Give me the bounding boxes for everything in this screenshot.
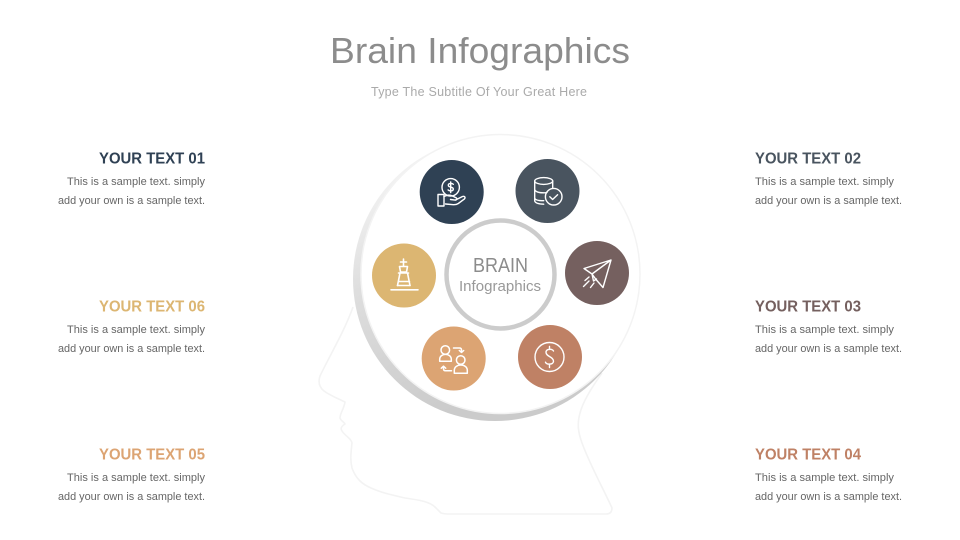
icon: chess piece [372,244,436,308]
text block 04: This is a sample text. simply [755,472,894,484]
text block 04: YOUR TEXT 04 [755,446,861,464]
icon: paper plane [565,241,629,305]
centre label [459,255,541,295]
text block 05: This is a sample text. simply [67,472,205,484]
text block 02: add your own is a sample text. [755,195,902,207]
text block 05: add your own is a sample text. [58,491,205,503]
icon: database check [516,159,580,223]
text block 04: add your own is a sample text. [755,491,902,503]
icon: people exchange [422,326,486,390]
text block 06: This is a sample text. simply [67,324,205,336]
text block 05 [58,446,205,503]
icon: coin in hand [420,160,484,224]
subtitle: Type The Subtitle Of Your Great Here [371,85,587,99]
centre label: Infographics [459,279,541,295]
text block 02 [755,150,902,207]
text block 01 [58,150,205,207]
text block 03 [755,298,902,355]
icon: dollar circle [518,325,582,389]
text block 01: YOUR TEXT 01 [99,150,205,168]
title: Brain Infographics [330,30,630,71]
brain white disc [361,134,640,414]
text block 06: add your own is a sample text. [58,343,205,355]
text block 03: YOUR TEXT 03 [755,298,861,316]
text block 02: This is a sample text. simply [755,176,894,188]
head silhouette [319,307,612,514]
centre ring [446,220,554,328]
text block 06: YOUR TEXT 06 [99,298,205,316]
text block 03: This is a sample text. simply [755,324,894,336]
text block 01: add your own is a sample text. [58,195,205,207]
brain crescent shadow [353,137,637,421]
centre label: BRAIN [473,255,528,277]
text block 02: YOUR TEXT 02 [755,150,861,168]
text block 03: add your own is a sample text. [755,343,902,355]
text block 04 [755,446,902,503]
text block 01: This is a sample text. simply [67,176,205,188]
text block 05: YOUR TEXT 05 [99,446,205,464]
text block 06 [58,298,205,355]
